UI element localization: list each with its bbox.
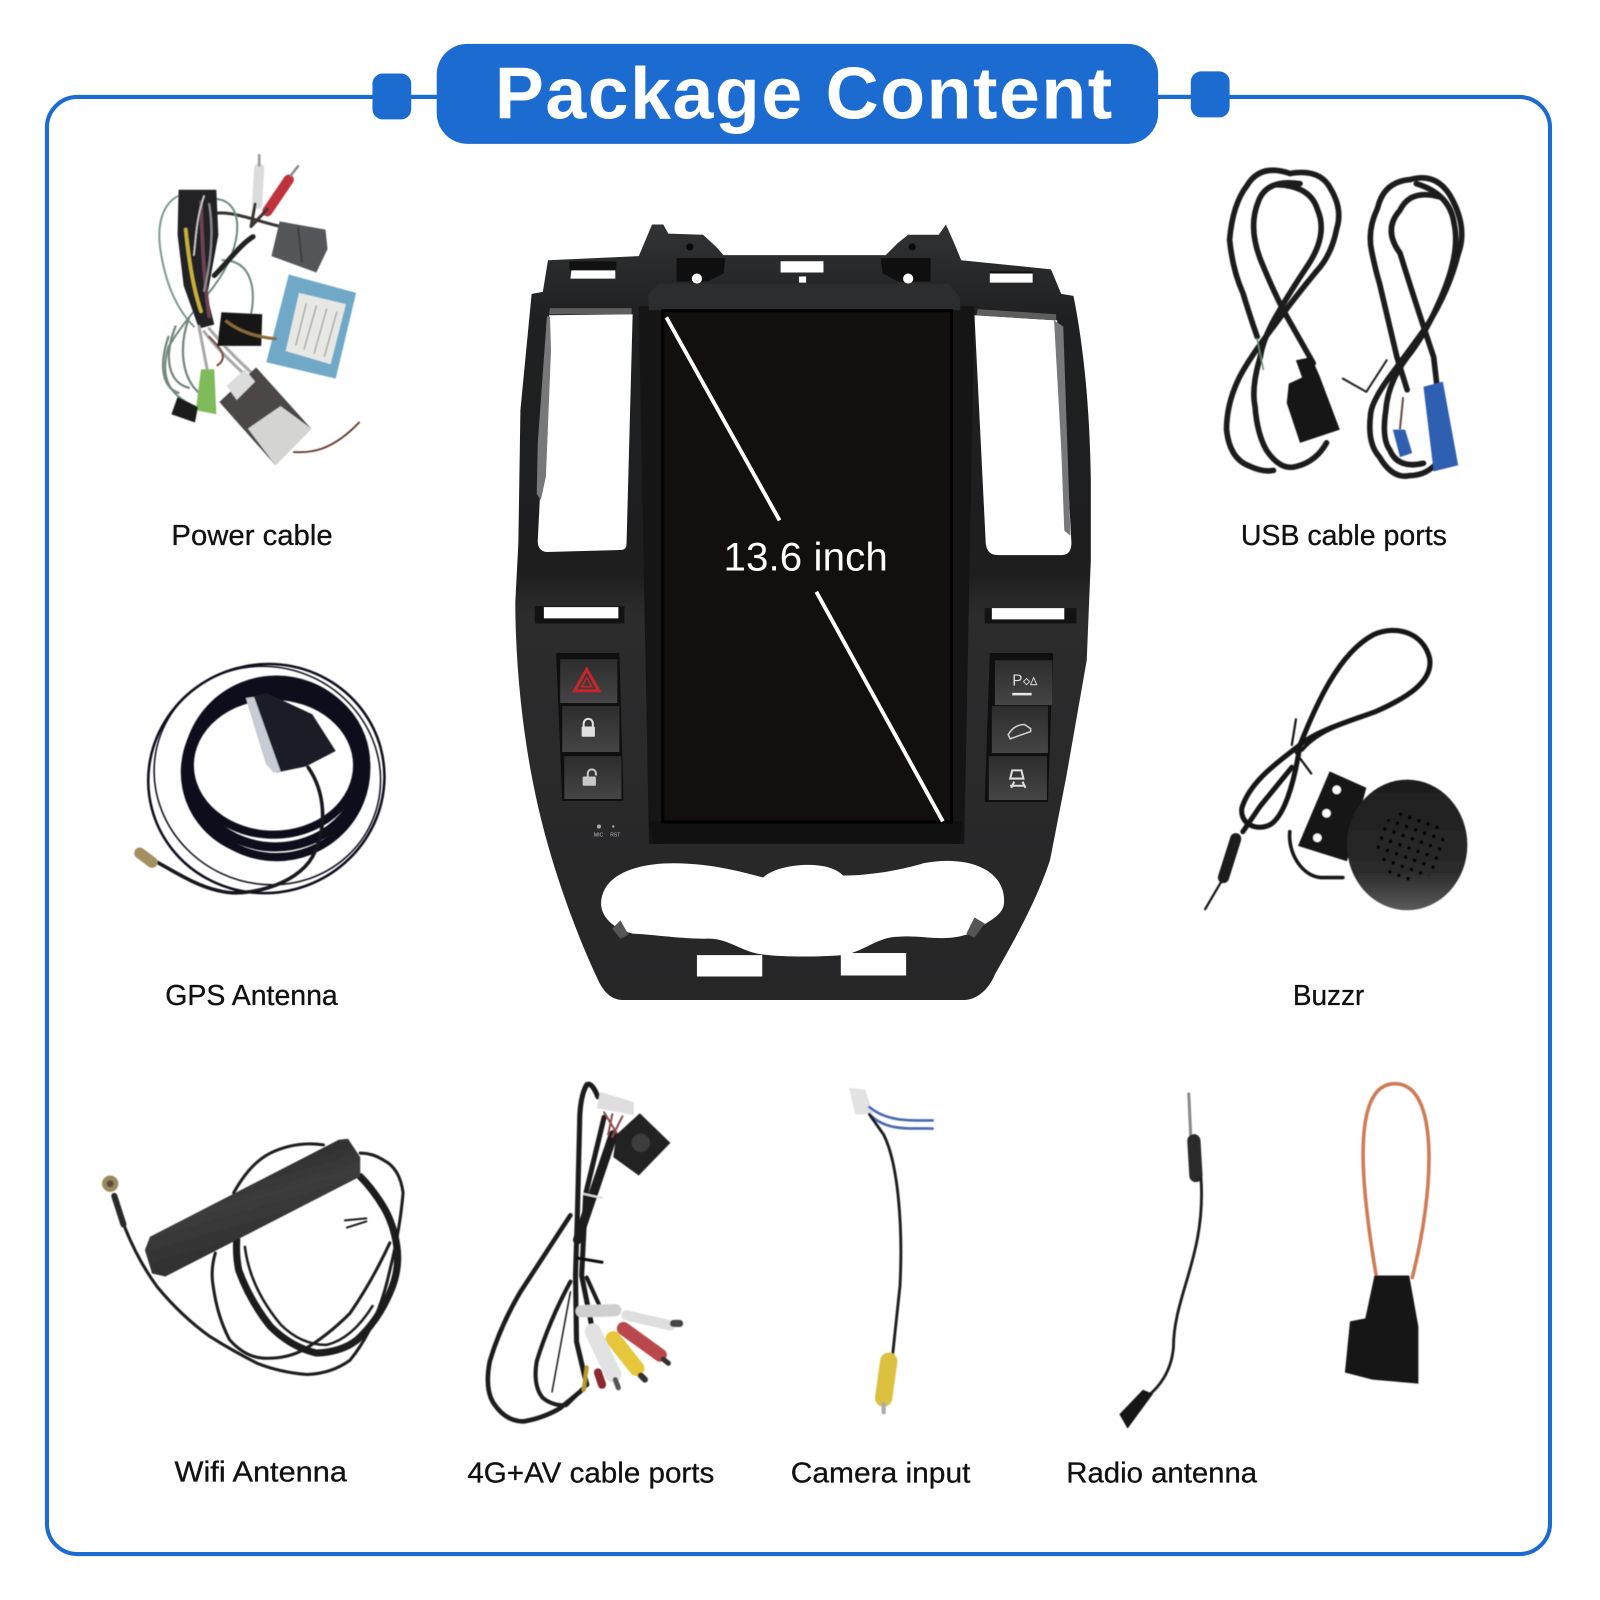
title: Package Content (495, 51, 1112, 134)
label: USB cable ports: USB cable ports (1241, 520, 1447, 552)
label: Wifi Antenna: Wifi Antenna (174, 1457, 348, 1489)
black connector (217, 312, 262, 346)
climate panel opening (601, 861, 1004, 957)
label: 4G+AV cable ports: 4G+AV cable ports (467, 1458, 714, 1490)
label: power cable: Power cable (171, 520, 333, 552)
mic and reset labels: MIC (594, 833, 604, 839)
left button stack (556, 653, 623, 801)
label: Buzzr: Buzzr (1293, 980, 1365, 1012)
wire bundle (178, 190, 218, 329)
header: title banner with connectors (372, 44, 1230, 144)
centre column (639, 306, 974, 844)
black 4G box (613, 1113, 670, 1176)
white connector (597, 1092, 634, 1115)
diagonal size line (666, 317, 943, 821)
blue module (266, 274, 356, 379)
item: wifi antenna (102, 1139, 403, 1374)
screen size label: 13.6 inch (723, 534, 888, 579)
grey module (219, 367, 311, 465)
item: power cable harness (159, 155, 359, 465)
item: head unit with 13.6 inch screen (515, 224, 1091, 1000)
top recess details (677, 258, 931, 282)
item: radio antenna cable (1119, 1094, 1202, 1429)
mic and reset labels (594, 824, 620, 839)
loop connector (1345, 1276, 1418, 1384)
side vent windows (538, 314, 633, 552)
RCA plugs (582, 1310, 680, 1390)
power connector (271, 221, 328, 272)
green connector (196, 369, 216, 414)
screen (661, 309, 953, 823)
label: radio antenna: Radio antenna (1066, 1458, 1258, 1490)
item: GPS antenna (118, 629, 417, 922)
antenna bar (145, 1139, 360, 1277)
item: camera input cable (849, 1088, 933, 1412)
right button stack (985, 653, 1053, 802)
mounting bracket (1298, 771, 1366, 861)
item: buzzer (1205, 630, 1467, 910)
cable connector (102, 1176, 118, 1192)
SMA connector (140, 853, 152, 862)
USB plug (1287, 357, 1340, 443)
small black plug (171, 397, 198, 422)
label: camera input: Camera input (791, 1458, 970, 1490)
item: 4G and AV cable (488, 1084, 680, 1421)
slots (535, 606, 1077, 623)
item: fibre optic loop (1345, 1084, 1429, 1384)
item: USB cables (1227, 170, 1462, 476)
speaker disc (1347, 780, 1467, 910)
mic and reset labels: RST (610, 833, 620, 839)
label: GPS Antenna: GPS Antenna (165, 980, 339, 1012)
blue connectors (1423, 382, 1458, 471)
right button stack: P (1012, 673, 1022, 690)
GPS puck (246, 693, 336, 772)
